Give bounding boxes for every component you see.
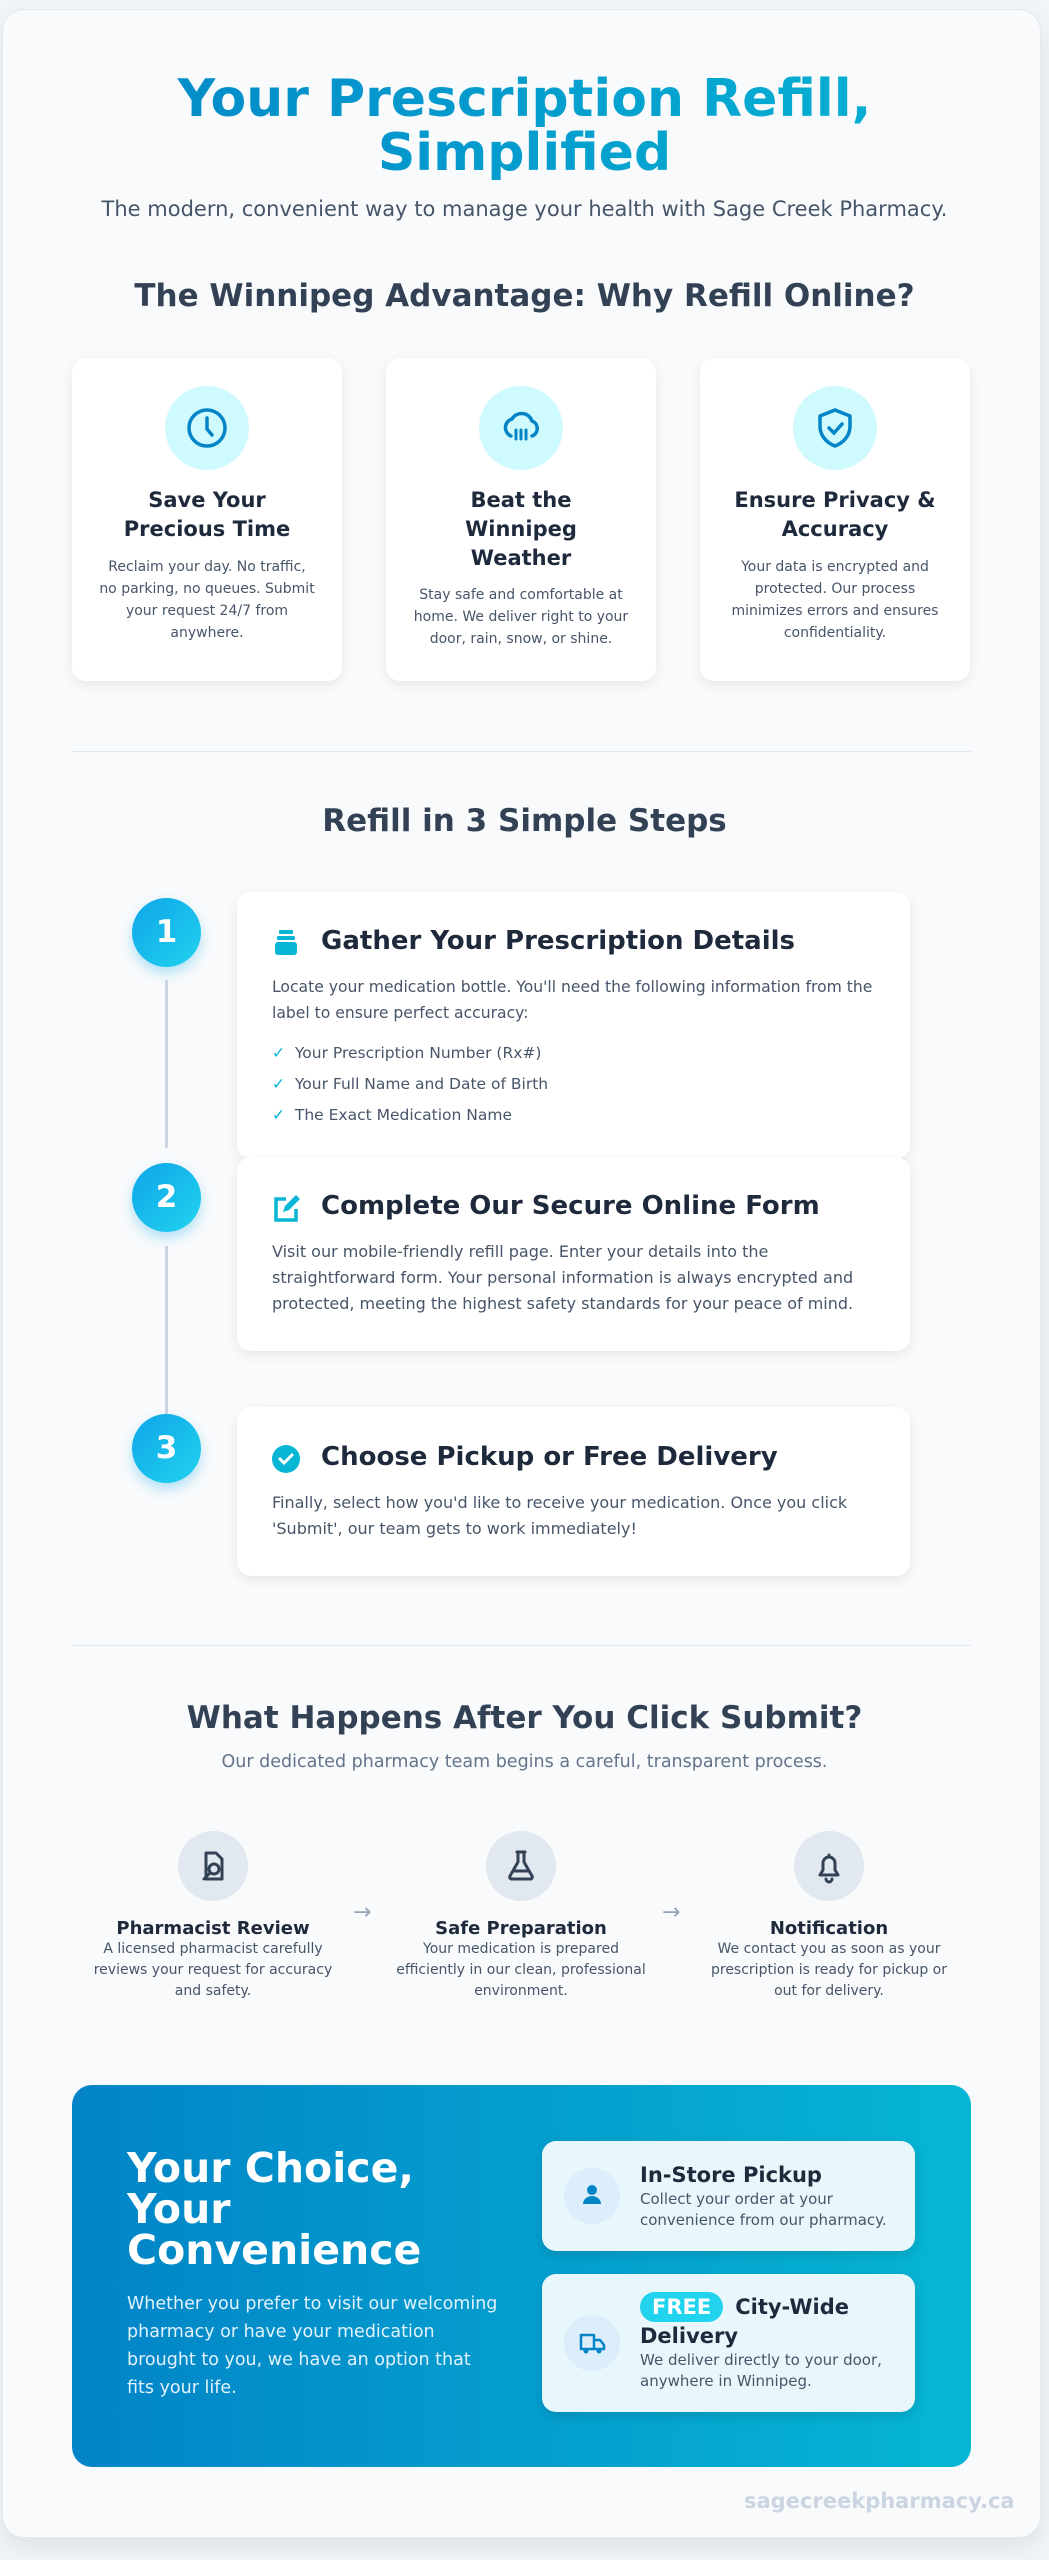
step text: ✓ The Exact Medication Name: [272, 1106, 512, 1124]
icon: edit: [274, 1195, 300, 1222]
panel text: Whether you prefer to visit our welcoming pharmacy or have your medication brought to you, we have an option that fits your life.: [127, 2294, 497, 2398]
option: delivery: anywhere in Winnipeg.: [640, 2372, 812, 2390]
step text: ✓ Your Prescription Number (Rx#): [272, 1044, 541, 1062]
card: weather: [386, 358, 656, 681]
arrow: →: [353, 1900, 371, 1925]
card title: Precious Time: [124, 517, 290, 541]
step text: Visit our mobile-friendly refill page. Enter your details into the straightforward form. Your personal information is always encrypted and protected, meeting the highest safety standards for your peace of mind.: [272, 1242, 853, 1313]
card title: Ensure Privacy &: [734, 488, 936, 512]
panel heading: Your Choice,: [127, 2144, 414, 2192]
process: review: A licensed pharmacist carefully reviews your request for accuracy and safety.: [94, 1941, 332, 1999]
process: preparation: [396, 1831, 646, 1999]
process: notification: Notification: [770, 1918, 888, 1939]
card text: Reclaim your day. No traffic, no parking, no queues. Submit your request 24/7 from anywhere.: [99, 559, 315, 641]
option: delivery: [542, 2274, 915, 2412]
card: privacy: [700, 358, 970, 681]
card title: Weather: [471, 546, 571, 570]
icon: check circle: [272, 1445, 300, 1473]
step 3 card: [237, 1407, 910, 1576]
option: delivery: We deliver directly to your door,: [640, 2351, 882, 2369]
card text: Stay safe and comfortable at home. We deliver right to your door, rain, snow, or shine.: [414, 587, 628, 647]
card title: Winnipeg: [465, 517, 577, 541]
panel heading: Convenience: [127, 2226, 421, 2274]
card title: Save Your: [148, 488, 266, 512]
arrow: →: [662, 1900, 680, 1925]
option: pickup: [542, 2141, 915, 2251]
process: review: [94, 1831, 332, 1999]
panel: your choice: [72, 2085, 971, 2467]
step 3 number: [132, 1414, 201, 1483]
option: pickup: In-Store Pickup: [640, 2163, 822, 2187]
process: notification: [711, 1831, 947, 1999]
step text: ✓ Your Full Name and Date of Birth: [272, 1075, 548, 1093]
step 2 card: [237, 1157, 910, 1351]
icon: cloud: [479, 386, 563, 470]
card title: [465, 488, 577, 570]
card title: [734, 488, 936, 541]
option: delivery: City-Wide: [735, 2295, 849, 2319]
card text: Your data is encrypted and protected. Our process minimizes errors and ensures confidentiality.: [732, 559, 938, 641]
icon: bottle: [275, 930, 297, 955]
icon: shield: [793, 386, 877, 470]
icon: truck: [564, 2315, 620, 2371]
process: preparation: Your medication is prepared efficiently in our clean, professional environment.: [396, 1941, 646, 1999]
step title: Gather Your Prescription Details: [321, 926, 795, 956]
card: save time: [72, 358, 342, 681]
title: Simplified: [378, 123, 671, 183]
step text: Locate your medication bottle. You'll need the following information from the label to ensure perfect accuracy:: [272, 978, 872, 1022]
title: Your Prescription Refill,: [178, 69, 871, 129]
process: review: Pharmacist Review: [116, 1918, 310, 1939]
card title: Beat the: [470, 488, 572, 512]
option: delivery: FREE: [652, 2295, 711, 2319]
option: pickup: Collect your order at your: [640, 2190, 833, 2208]
option: delivery: Delivery: [640, 2324, 738, 2348]
panel heading: [126, 2144, 421, 2274]
icon: flask: [486, 1831, 556, 1901]
step 1 card: [237, 892, 910, 1159]
icon: clock: [165, 386, 249, 470]
process: notification: We contact you as soon as your prescription is ready for pickup or out for delivery.: [711, 1941, 947, 1999]
step 1 number: 1: [156, 914, 177, 950]
card title: [124, 488, 290, 541]
icon: document search: [178, 1831, 248, 1901]
panel heading: Your: [127, 2185, 231, 2233]
icon: bell: [794, 1831, 864, 1901]
title: [0, 72, 1049, 180]
step 2 number: [132, 1163, 201, 1232]
step title: Complete Our Secure Online Form: [321, 1191, 820, 1221]
step title: Choose Pickup or Free Delivery: [321, 1442, 778, 1472]
heading: after submit: What Happens After You Click Submit?: [187, 1700, 862, 1736]
step 2 number: 2: [156, 1179, 177, 1215]
heading: advantage: The Winnipeg Advantage: Why Refill Online?: [134, 278, 915, 314]
step text: [272, 978, 872, 1124]
option: pickup: convenience from our pharmacy.: [640, 2211, 887, 2229]
step 3 number: 3: [156, 1430, 177, 1466]
heading: steps: Refill in 3 Simple Steps: [322, 803, 727, 839]
process: preparation: Safe Preparation: [435, 1918, 607, 1939]
subtitle: The modern, convenient way to manage your health with Sage Creek Pharmacy.: [102, 197, 947, 221]
step 1 number: [132, 898, 201, 967]
subtitle: Our dedicated pharmacy team begins a careful, transparent process.: [222, 1752, 828, 1772]
footer url: sagecreekpharmacy.ca: [744, 2489, 1015, 2513]
step text: Finally, select how you'd like to receive your medication. Once you click 'Submit', our team gets to work immediately!: [272, 1493, 847, 1538]
card title: Accuracy: [782, 517, 888, 541]
icon: person: [564, 2168, 620, 2224]
